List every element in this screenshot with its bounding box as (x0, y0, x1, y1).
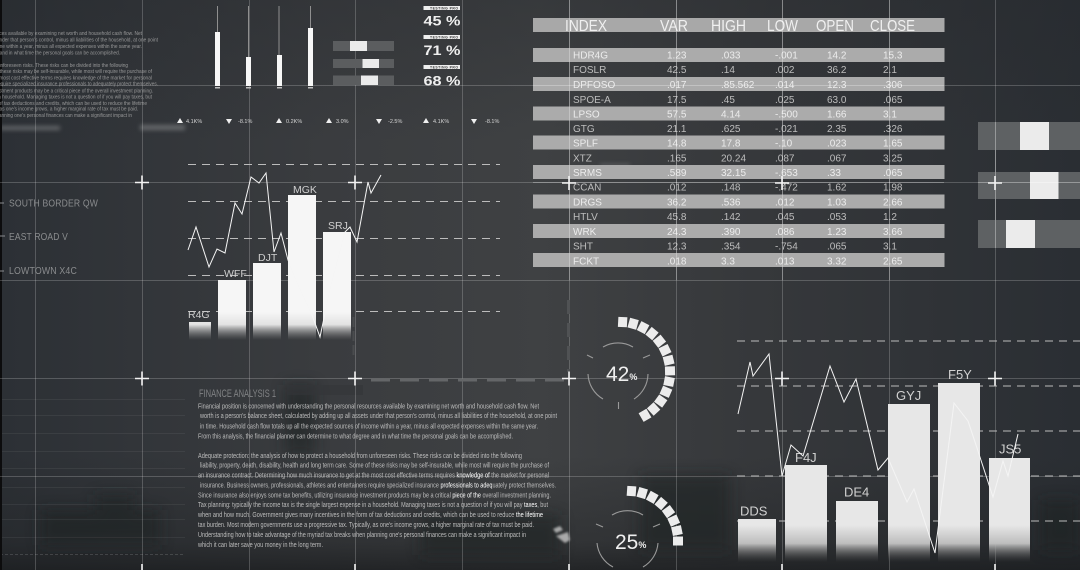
bar labels: R4G (188, 309, 210, 321)
text block: cropped top-left paragraph (0, 31, 159, 119)
bar labels (188, 184, 348, 321)
table rows: 20.24 (721, 154, 746, 164)
trend line (738, 354, 1018, 553)
table rows: 17.5 (667, 95, 687, 106)
right sliders (978, 122, 1080, 248)
table rows: 4.14 (721, 110, 741, 120)
crosshair markers (135, 176, 1002, 570)
table rows: -.500 (775, 110, 798, 120)
table rows: LPSO (573, 110, 600, 120)
bar labels: DDS (740, 504, 768, 518)
table rows: 1.23 (827, 227, 847, 238)
table header: CLOSE (870, 18, 915, 35)
table rows: -.472 (775, 182, 798, 194)
finance analysis text (197, 388, 557, 549)
table rows: .589 (667, 168, 687, 179)
paragraphs: Understanding how to take advantage of the myriad tax breaks when planning one's personal finances can make a significant impact in (198, 532, 526, 539)
table rows: 24.3 (667, 227, 687, 238)
table rows: .014 (775, 80, 795, 91)
gauge value: % (629, 372, 637, 382)
table rows: -.021 (775, 124, 798, 135)
table rows: 3.25 (883, 154, 903, 164)
bars (738, 383, 1030, 562)
table rows: .045 (775, 212, 795, 223)
table rows: 1.98 (883, 182, 903, 194)
bar labels: JS5 (999, 442, 1021, 456)
paragraphs: which it can later save you money in the long term. (197, 542, 323, 549)
dashed connector (354, 300, 568, 380)
paragraphs (197, 404, 557, 549)
table rows: 3.1 (883, 110, 897, 120)
table rows: 1.2 (883, 212, 897, 223)
ticker row: -2.5% (388, 119, 402, 125)
row stripes (533, 48, 944, 267)
table rows: 2.1 (883, 65, 897, 76)
table rows: 1.65 (883, 138, 903, 150)
table header: VAR (660, 18, 688, 35)
right bar chart (737, 341, 1080, 562)
ticker row: 0.2K% (286, 119, 302, 125)
table rows: 63.0 (827, 95, 847, 106)
table rows: FCKT (573, 256, 599, 268)
small sliders (333, 41, 394, 85)
table rows: -.653 (775, 168, 798, 179)
paragraphs: Adequate protection: the analysis of how to protect a household from unforeseen risks. These risks can be divided into the following (198, 453, 522, 460)
table rows: 12.3 (827, 80, 847, 91)
table rows: XTZ (573, 154, 592, 164)
table rows: 3.66 (883, 227, 903, 238)
table rows: 2.65 (883, 256, 903, 268)
bar labels: DE4 (844, 484, 869, 500)
table rows: .165 (667, 154, 687, 164)
table rows: DRGS (573, 198, 602, 208)
table rows: .002 (775, 65, 795, 76)
table rows: .018 (667, 256, 687, 268)
table rows: GTG (573, 124, 595, 135)
paragraphs: worth is a person's balance sheet, calculated by adding up all assets under that person's control, minus all liabilities of the household, at one point (199, 413, 557, 420)
gauge: 25 percent (596, 486, 683, 567)
location labels (0, 198, 98, 277)
table rows (573, 50, 903, 268)
gauge value: 42 (606, 363, 629, 386)
table rows: 45.8 (667, 212, 687, 223)
table rows: 1.62 (827, 182, 847, 194)
table rows: .087 (775, 154, 795, 164)
table rows: .065 (883, 168, 903, 179)
inner ring (587, 343, 650, 409)
paragraphs: an insurance contract. Determining how much insurance to get at the most cost effective terms requires knowledge of the market for personal (198, 472, 549, 480)
paragraphs: in time. Household cash flow totals up all the expected sources of income within a year, minus all expected expenses within the same year. (200, 424, 538, 430)
location labels: SOUTH BORDER QW (9, 198, 98, 210)
table rows: .536 (721, 198, 741, 208)
bar labels: F4J (795, 450, 817, 465)
bar labels: MGK (293, 184, 317, 196)
table rows: .306 (883, 80, 903, 91)
table header: OPEN (816, 18, 854, 35)
table rows: .013 (775, 256, 795, 268)
paragraphs: insurance. Business owners, professionals, athletes and entertainers require specialized insurance professionals to adequately protect themselves. (200, 482, 556, 490)
table rows: 3.3 (721, 256, 735, 268)
heading: FINANCE ANALYSIS 1 (199, 388, 276, 400)
bar labels (740, 367, 1021, 518)
paragraphs: liability, property, death, disability, health and long term care. Some of these risks may be self-insurable, while most will require the purchase of (200, 462, 549, 470)
percent readouts: TESTING PRO (430, 35, 458, 39)
table rows: .053 (827, 212, 847, 223)
table rows: HDR4G (573, 50, 608, 62)
paragraphs: tax burden. Most modern governments use a progressive tax. Typically, as one's income grows, a higher marginal rate of tax must be paid. (198, 522, 534, 529)
table rows: .142 (721, 212, 741, 223)
percent readouts: TESTING PRO (430, 65, 458, 69)
table rows: WRK (573, 227, 597, 238)
table rows: .45 (721, 95, 735, 106)
table rows: .390 (721, 227, 741, 238)
ticker row: -8.1% (485, 119, 499, 125)
table rows: .354 (721, 242, 741, 252)
table header: INDEX (565, 18, 608, 35)
table rows: HTLV (573, 212, 598, 223)
table rows: SPOE-A (573, 95, 611, 106)
table rows: FOSLR (573, 65, 606, 76)
paragraphs: Financial position is concerned with understanding the personal resources available by examining net worth and household cash flow. Net (198, 404, 539, 410)
percent readouts: 45 % (424, 12, 461, 28)
table rows: CCAN (573, 182, 601, 194)
gauge value: % (638, 540, 646, 550)
table rows: 57.5 (667, 110, 687, 120)
percent readouts: 68 % (424, 72, 461, 88)
ticker row: -8.1% (238, 119, 252, 125)
percent readouts: TESTING PRO (430, 6, 458, 10)
table rows: 14.2 (827, 50, 847, 62)
left bar chart (188, 164, 500, 340)
data table (533, 18, 944, 268)
table rows: .067 (827, 154, 847, 164)
table rows: 36.2 (667, 198, 687, 208)
ticker row: 3.0% (336, 119, 349, 125)
table rows: .85.562 (721, 80, 755, 91)
bar labels: SRJ (328, 220, 348, 232)
bars (189, 195, 351, 340)
table rows: .012 (775, 198, 795, 208)
table rows: .017 (667, 80, 687, 91)
table rows: .086 (775, 227, 795, 238)
bar labels: DJT (258, 252, 278, 264)
ticker row: 4.1K% (186, 119, 202, 125)
ticker row: 4.1K% (433, 119, 449, 125)
table grid overlay (533, 0, 944, 280)
table rows: .033 (721, 50, 741, 62)
gauge: 42 percent (587, 317, 675, 422)
table rows: 1.03 (827, 198, 847, 208)
table rows: 17.8 (721, 138, 741, 150)
table rows: .025 (775, 95, 795, 106)
bar labels: WFF (224, 268, 247, 280)
table rows: 1.66 (827, 110, 847, 120)
trend line (188, 173, 381, 337)
table rows: 12.3 (667, 242, 687, 252)
inner ring (596, 511, 660, 567)
table rows: .33 (827, 168, 841, 179)
table rows: 32.15 (721, 168, 746, 179)
candlestick chart (215, 6, 313, 88)
paragraphs: when and how much. Government gives many incentives in the form of tax deductions and credits, which can be used to reduce the lifetime (197, 512, 543, 519)
table rows: 1.23 (667, 50, 687, 62)
table rows: .065 (827, 242, 847, 252)
table rows: SRMS (573, 168, 602, 179)
table rows: .023 (827, 138, 847, 150)
table rows: 36.2 (827, 65, 847, 76)
table header (533, 18, 944, 35)
table rows: 3.1 (883, 242, 897, 252)
gauge segments (618, 317, 675, 422)
table rows: 2.35 (827, 124, 847, 135)
bar labels: GYJ (896, 388, 921, 403)
location labels: LOWTOWN X4C (9, 265, 77, 277)
table header: HIGH (711, 18, 746, 35)
paragraphs: Tax planning: typically the income tax is the single largest expense in a household. Managing taxes is not a question of if you will pay taxes, but (198, 502, 548, 509)
gauge segments (627, 486, 683, 546)
table rows: DPFOSO (573, 80, 615, 91)
table rows: .326 (883, 124, 903, 135)
table rows: .012 (667, 182, 687, 194)
bar labels: F5Y (948, 367, 972, 382)
location labels: EAST ROAD V (9, 231, 68, 243)
table rows: .065 (883, 95, 903, 106)
table header: LOW (767, 18, 798, 35)
table rows: 2.66 (883, 198, 903, 208)
gauge value: 25 (615, 531, 638, 554)
table rows: 14.8 (667, 138, 687, 150)
percent readouts (424, 6, 461, 88)
table rows: .148 (721, 182, 741, 194)
table rows: SPLF (573, 138, 598, 150)
ticker row (177, 118, 499, 125)
table rows: -.10 (775, 138, 793, 150)
table rows: -.001 (775, 50, 798, 62)
table rows: 15.3 (883, 50, 903, 62)
table rows: .625 (721, 124, 741, 135)
paragraphs: Since insurance also enjoys some tax benefits, utilizing insurance investment products may be a critical piece of the overall investment planning. (198, 492, 551, 500)
table rows: SHT (573, 242, 593, 252)
table rows: 42.5 (667, 65, 687, 76)
table rows: -.754 (775, 242, 798, 252)
table rows: .14 (721, 65, 735, 76)
table rows: 21.1 (667, 124, 687, 135)
percent readouts: 71 % (424, 42, 461, 58)
paragraphs: From this analysis, the financial planner can determine to what degree and in what time the personal goals can be accomplished. (198, 434, 513, 440)
table rows: 3.32 (827, 256, 847, 268)
